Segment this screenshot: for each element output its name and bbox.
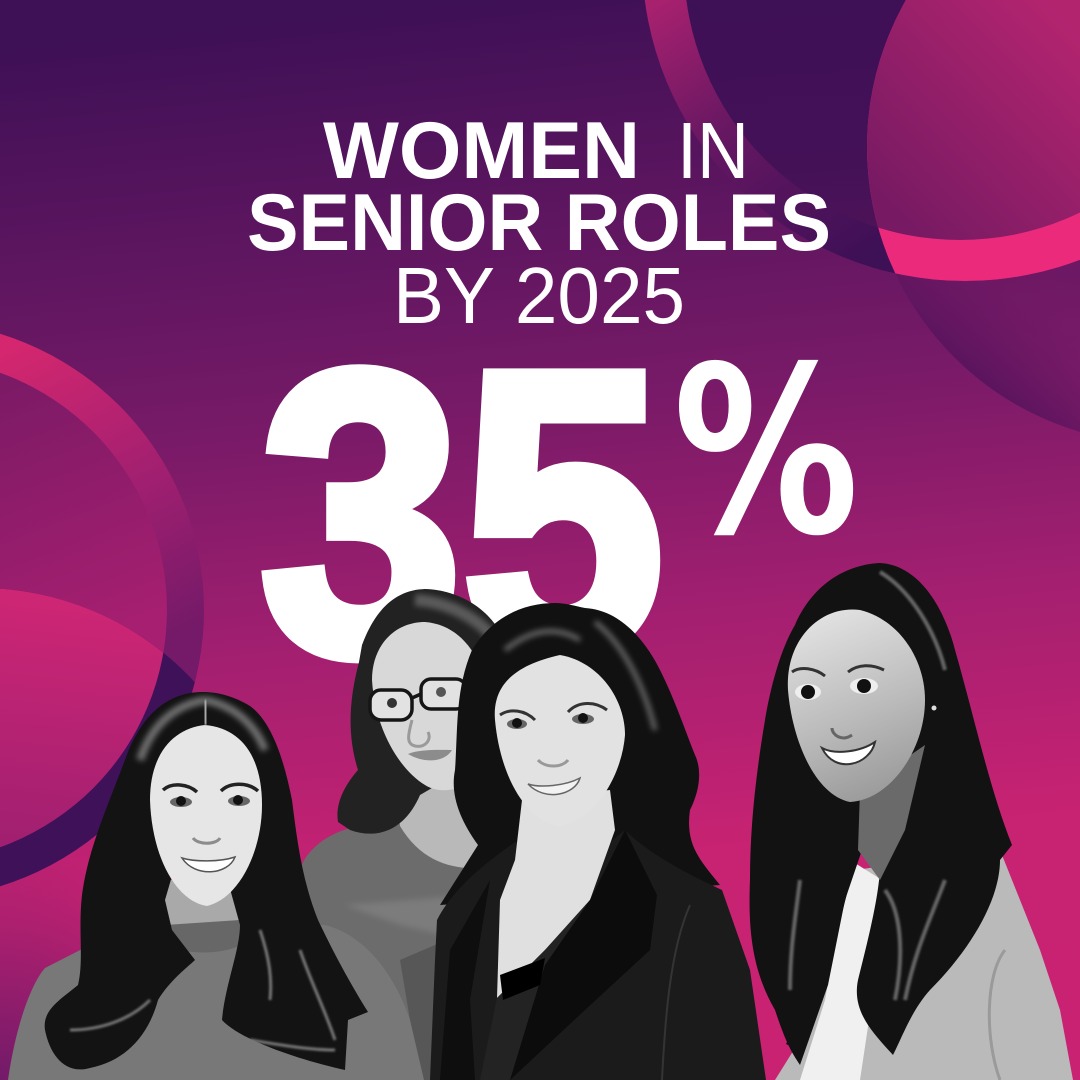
glasses	[370, 679, 466, 720]
title: WOMEN	[323, 106, 640, 196]
person: woman in turtleneck (left)	[8, 692, 424, 1080]
big statistic: 35%: 35	[260, 289, 664, 738]
title: IN	[677, 106, 749, 195]
title: BY 2025	[393, 251, 685, 340]
decorative circles: top right	[642, 0, 1080, 444]
title: SENIOR ROLES	[247, 178, 831, 268]
big statistic: 35%: %	[673, 317, 859, 587]
person: woman in blazer (centre)	[430, 603, 766, 1080]
decorative circles: left	[0, 321, 204, 899]
person: woman with glasses (back)	[300, 589, 502, 1080]
blazer	[430, 830, 766, 1080]
title	[247, 106, 831, 340]
person: woman in cardigan (right)	[750, 563, 1073, 1080]
